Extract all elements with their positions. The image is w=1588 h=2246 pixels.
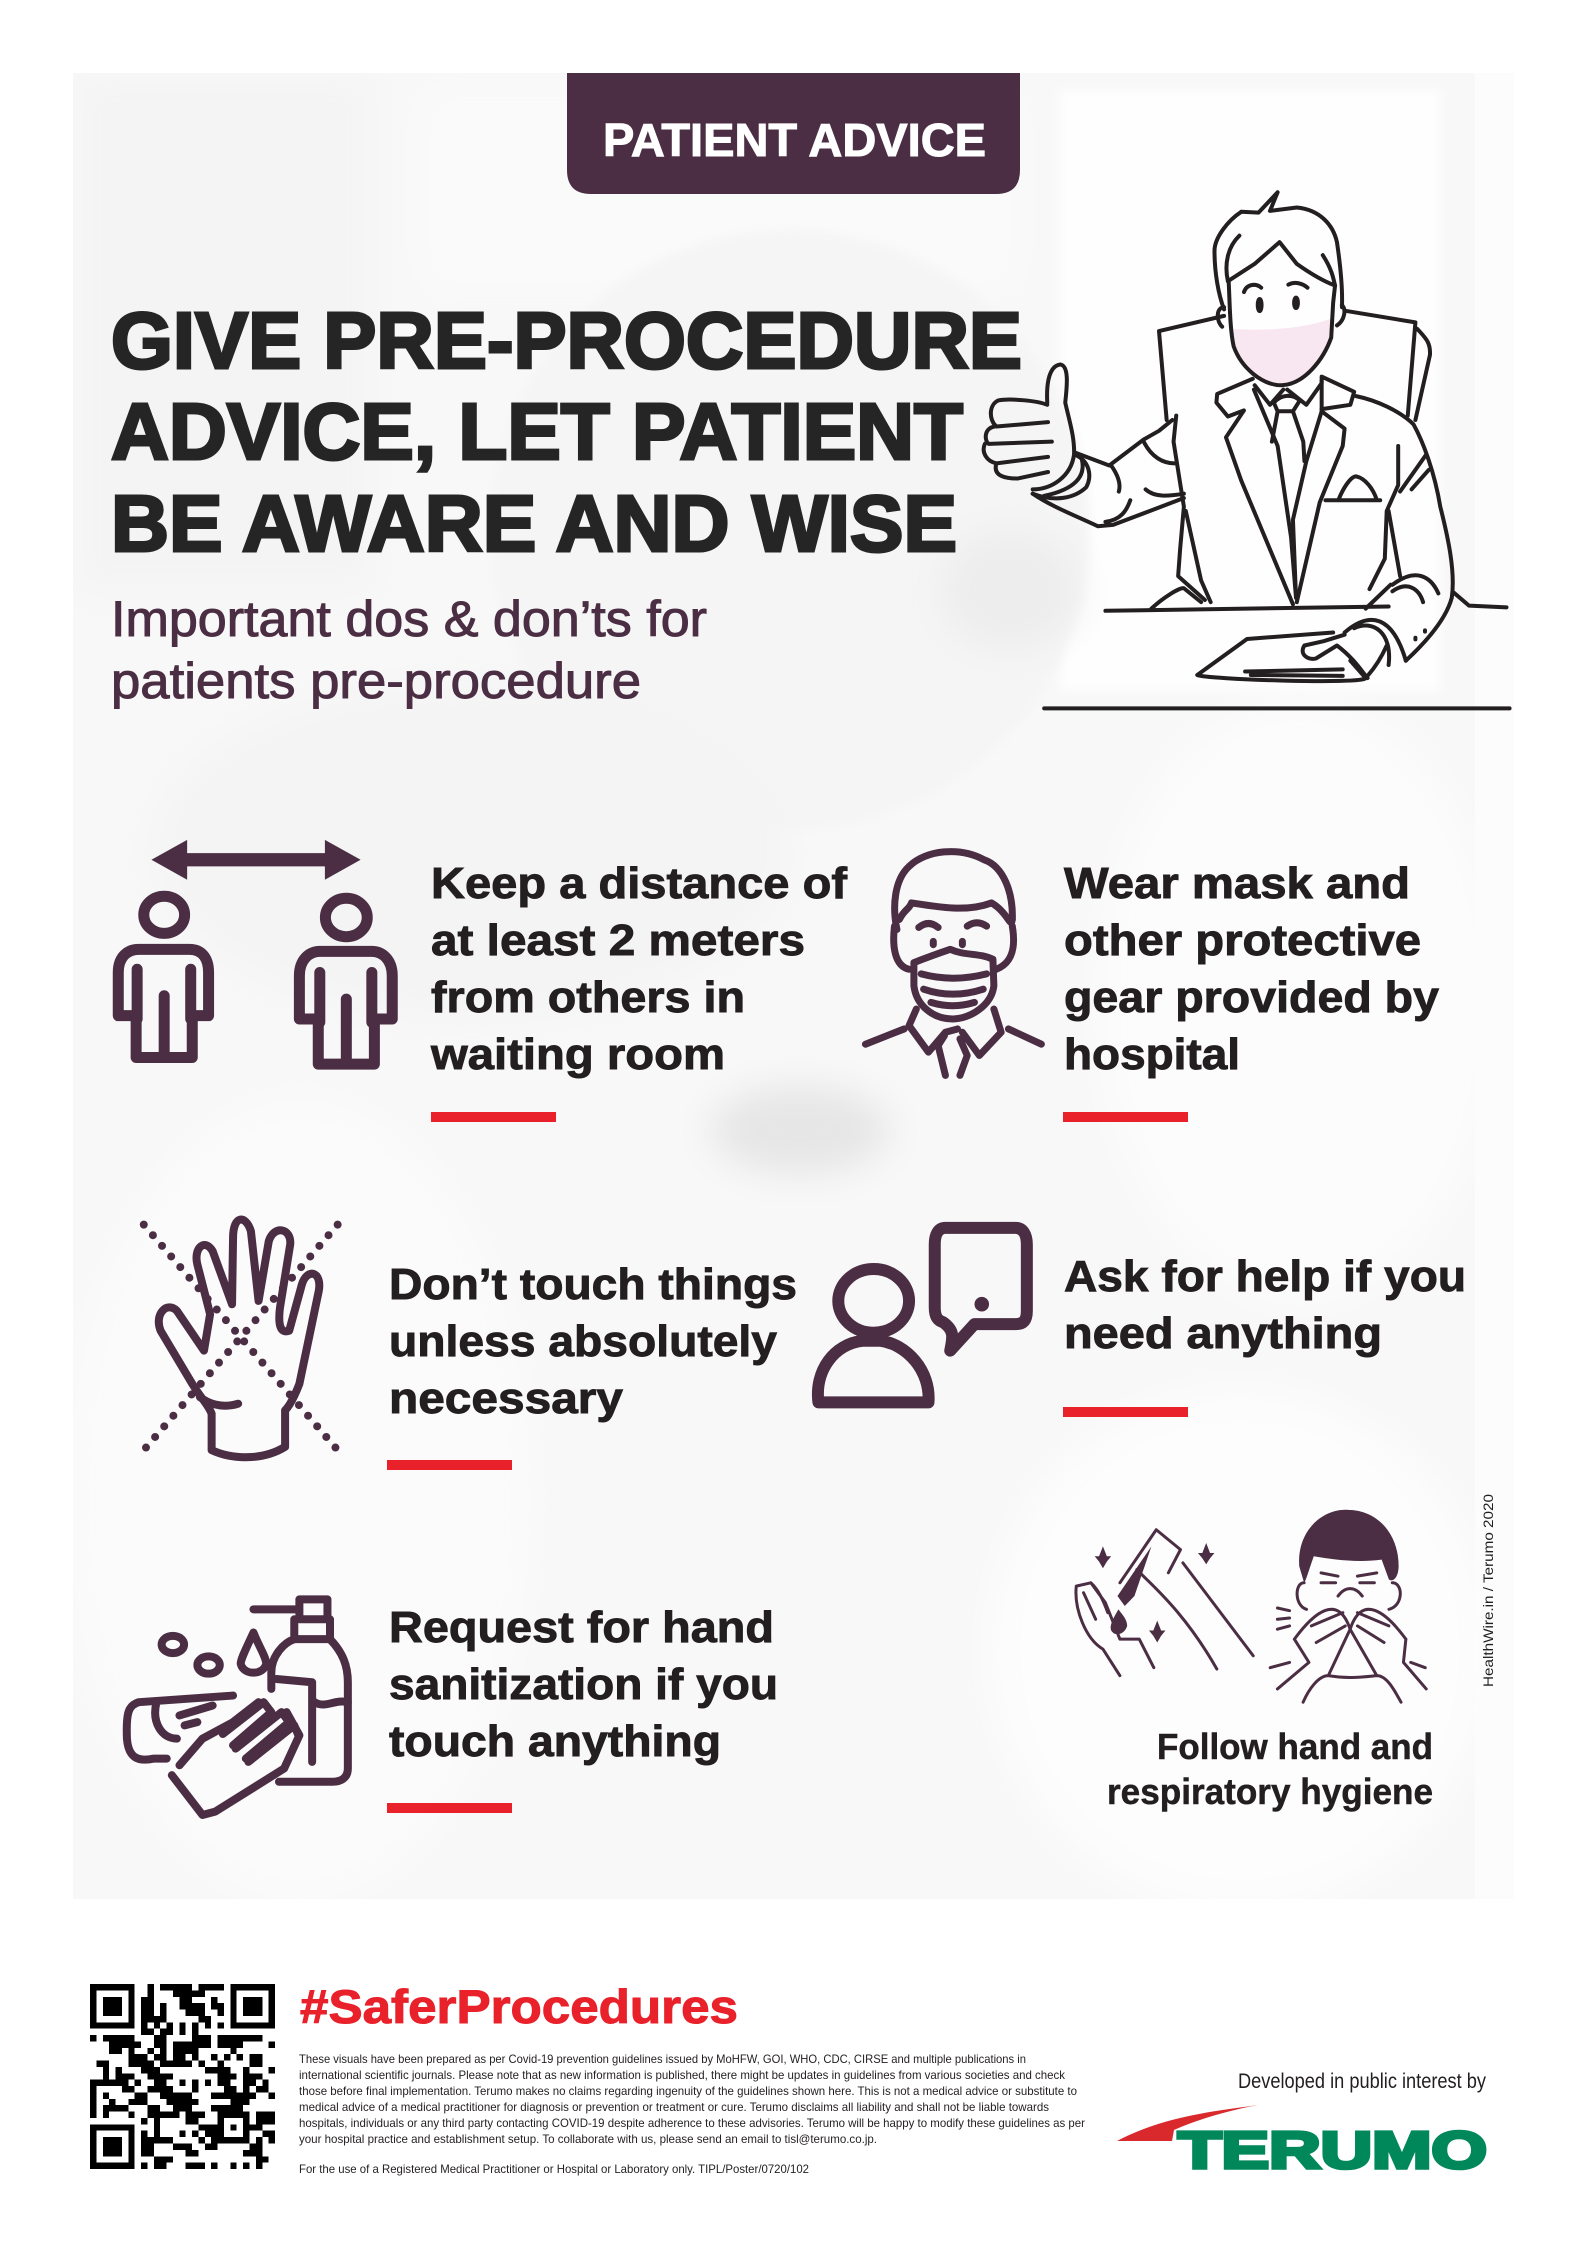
text: ask for help: Ask for help if you — [1064, 1252, 1466, 1301]
text: keep distance: waiting room — [430, 1030, 725, 1079]
panel: request hand sanitization — [127, 1599, 778, 1815]
panel: do not touch — [144, 1220, 797, 1470]
panel: ask for help — [818, 1228, 1466, 1417]
text: do not touch: unless absolutely — [389, 1317, 778, 1366]
text: keep distance — [430, 859, 847, 1079]
legal disclaimer text: those before final implementation. Terumo makes no claims regarding ingenuity of the guidelines shown here. This is not a medical advice or substitute to — [299, 2084, 1077, 2098]
background photo panel — [73, 73, 1088, 1200]
text: wear mask: hospital — [1064, 1030, 1240, 1079]
QR code — [90, 1987, 275, 2166]
text: request hand sanitization — [389, 1603, 778, 1766]
text: request hand sanitization: touch anything — [389, 1717, 721, 1766]
legal disclaimer text: hospitals, individuals or any third party contacting COVID-19 despite adherence to these advisories. Terumo will be happy to modify these guidelines as per — [299, 2116, 1085, 2130]
panel: keep distance — [118, 840, 847, 1122]
text: wear mask: gear provided by — [1064, 973, 1440, 1022]
panel: wear mask — [865, 852, 1440, 1122]
mask — [1231, 318, 1333, 385]
text: keep distance: Keep a distance of — [431, 859, 847, 908]
icon: washing hands with soap bottle — [127, 1599, 348, 1815]
text: wear mask — [1064, 859, 1440, 1079]
text: ask for help: need anything — [1064, 1309, 1382, 1358]
text: wear mask: other protective — [1064, 916, 1421, 965]
legal disclaimer text: medical advice of a medical practitioner for diagnosis or prevention or treatment or cure. Terumo disclaims all liability and shall not be liable towards — [299, 2100, 1049, 2114]
icon: sanitizing hands and covering cough — [1076, 1510, 1426, 1702]
legal disclaimer text: your hospital practice and establishment setup. To collaborate with us, please send an email to tisl@terumo.co.jp. — [299, 2132, 877, 2146]
subtitle — [111, 591, 707, 709]
text: request hand sanitization: sanitization if you — [389, 1660, 778, 1709]
text: wear mask: Wear mask and — [1064, 859, 1410, 908]
text: keep distance: from others in — [431, 973, 745, 1022]
hashtag: saferprocedures: #SaferProcedures — [300, 1980, 738, 2033]
logo: terumo — [1117, 2105, 1487, 2180]
text: request hand sanitization: Request for hand — [389, 1603, 774, 1652]
text: do not touch: Don’t touch things — [389, 1260, 797, 1309]
legal disclaimer text: These visuals have been prepared as per Covid-19 prevention guidelines issued by MoHFW, GOI, WHO, CDC, CIRSE and multiple publications in — [299, 2052, 1026, 2066]
title: BE AWARE AND WISE — [111, 479, 957, 568]
developed in public interest by: Developed in public interest by — [1238, 2070, 1486, 2093]
text: do not touch — [389, 1260, 797, 1423]
text: hygiene: Follow hand and — [1157, 1726, 1433, 1767]
icon: man wearing mask — [865, 852, 1041, 1075]
credit: healthwire terumo 2020: HealthWire.in / Terumo 2020 — [1480, 1494, 1496, 1687]
text: hygiene — [1107, 1726, 1433, 1812]
text: ask for help — [1064, 1252, 1466, 1358]
icon: two people with distance arrow — [118, 840, 392, 1064]
text: keep distance: at least 2 meters — [431, 916, 805, 965]
icon: crossed out hand — [144, 1220, 338, 1457]
legal disclaimer text: For the use of a Registered Medical Practitioner or Hospital or Laboratory only. TIPL/Poster/0720/102 — [299, 2162, 809, 2176]
text: do not touch: necessary — [389, 1374, 624, 1423]
panel: hand and respiratory hygiene — [1076, 1510, 1433, 1812]
icon: person with speech bubble — [818, 1228, 1027, 1402]
heading tab: patient advice: PATIENT ADVICE — [603, 114, 986, 166]
title: GIVE PRE-PROCEDURE — [111, 296, 1022, 385]
title: ADVICE, LET PATIENT — [111, 387, 963, 476]
heading tab: patient advice — [567, 73, 1020, 194]
subtitle: patients pre-procedure — [111, 653, 641, 709]
title — [111, 296, 1022, 568]
legal disclaimer text — [299, 2052, 1085, 2176]
illustration: masked doctor giving thumbs up at desk — [984, 192, 1510, 708]
legal disclaimer text: international scientific journals. Please note that as new information is published, there might be updates in guidelines from various societies and check — [299, 2068, 1066, 2082]
subtitle: Important dos & don’ts for — [111, 591, 707, 647]
logo: terumo: TERUMO — [1178, 2122, 1487, 2180]
text: hygiene: respiratory hygiene — [1107, 1771, 1433, 1812]
